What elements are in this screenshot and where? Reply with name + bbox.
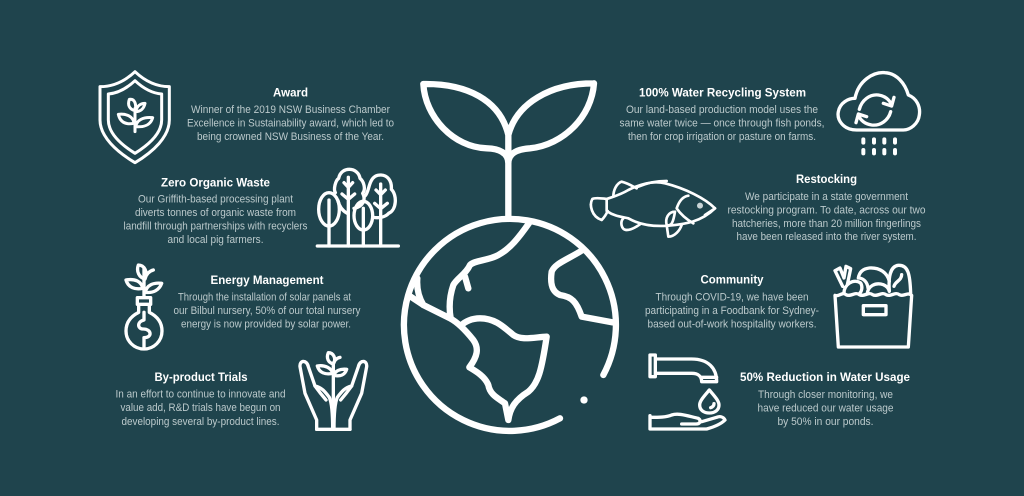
text: restocking description: hatcheries, more than 20 million fingerlings [732, 218, 921, 230]
text: energy management description: Through the installation of solar panels at [178, 292, 351, 304]
panel: water recycling [620, 73, 920, 153]
icon: cloud with recycling arrows and rain [838, 73, 920, 153]
icon: fish [591, 181, 715, 237]
text: water usage reduction description: Through closer monitoring, we [758, 389, 893, 401]
heading: zero organic waste: Zero Organic Waste [161, 176, 270, 190]
icon: hands holding plant [300, 353, 367, 429]
icon: trees [317, 169, 398, 246]
text: zero organic waste description: diverts tonnes of organic waste from [135, 207, 296, 219]
text: award description: Winner of the 2019 NSW Business Chamber [191, 104, 390, 116]
text: restocking description: We participate in a state government [745, 191, 908, 203]
text: by-product trials description: In an effort to continue to innovate and [116, 388, 286, 400]
text: community description [645, 292, 819, 330]
panel: energy management [126, 265, 361, 349]
text: water usage reduction description: have reduced our water usage [758, 402, 894, 414]
icon: grocery bag [835, 265, 912, 347]
text: water recycling description: then for crop irrigation or pasture on farms. [628, 131, 816, 143]
panel: by-product trials [116, 353, 367, 429]
heading: water recycling: 100% Water Recycling System [639, 86, 806, 100]
text: energy management description: our Bilbul nursery, 50% of our total nursery [174, 305, 361, 317]
icon: tap, water drop and hand [650, 355, 725, 429]
text: community description: Through COVID-19, we have been [656, 292, 808, 304]
text: restocking description: have been released into the river system. [736, 231, 916, 243]
heading: water usage reduction: 50% Reduction in Water Usage [740, 370, 910, 384]
text: energy management description [174, 292, 361, 330]
text: award description [187, 104, 394, 143]
text: award description: being crowned NSW Business of the Year. [197, 131, 384, 143]
text: by-product trials description: developing several by-product lines. [122, 416, 280, 428]
text: energy management description: energy is now provided by solar power. [181, 318, 351, 330]
icon: light bulb with plant [126, 265, 162, 349]
heading: energy management: Energy Management [210, 273, 324, 287]
text: zero organic waste description: and local pig farmers. [168, 234, 264, 246]
text: zero organic waste description: Our Griffith-based processing plant [138, 194, 293, 206]
text: by-product trials description [116, 388, 286, 428]
text: by-product trials description: value add, R&D trials have begun on [120, 402, 280, 414]
text: restocking description: restocking program. To date, across our two [728, 204, 926, 216]
text: water recycling description [620, 104, 824, 143]
text: water recycling description: same water twice — once through fish ponds, [620, 118, 824, 130]
text: zero organic waste description: landfill through partnerships with recyclers [124, 220, 308, 232]
panel: award [100, 72, 394, 163]
heading: by-product trials: By-product Trials [154, 370, 248, 384]
panel: zero organic waste [124, 169, 398, 246]
heading: restocking: Restocking [796, 172, 857, 186]
text: award description: Excellence in Sustainability award, which led to [187, 118, 394, 130]
text: restocking description [728, 191, 926, 243]
text: community description: based out-of-work hospitality workers. [648, 318, 816, 330]
text: water recycling description: Our land-based production model uses the [626, 104, 818, 116]
panel: water usage reduction [650, 355, 910, 429]
text: water usage reduction description: by 50% in our ponds. [778, 416, 874, 428]
panel: community [645, 265, 912, 347]
panel: restocking [591, 172, 926, 243]
text: zero organic waste description [124, 194, 308, 246]
text: water usage reduction description [758, 389, 894, 428]
heading: community: Community [700, 272, 764, 286]
icon: shield with plant [100, 72, 169, 163]
text: community description: participating in a Foodbank for Sydney- [645, 305, 819, 317]
central icon: seedling growing from globe [404, 83, 616, 431]
heading: award: Award [273, 86, 308, 100]
